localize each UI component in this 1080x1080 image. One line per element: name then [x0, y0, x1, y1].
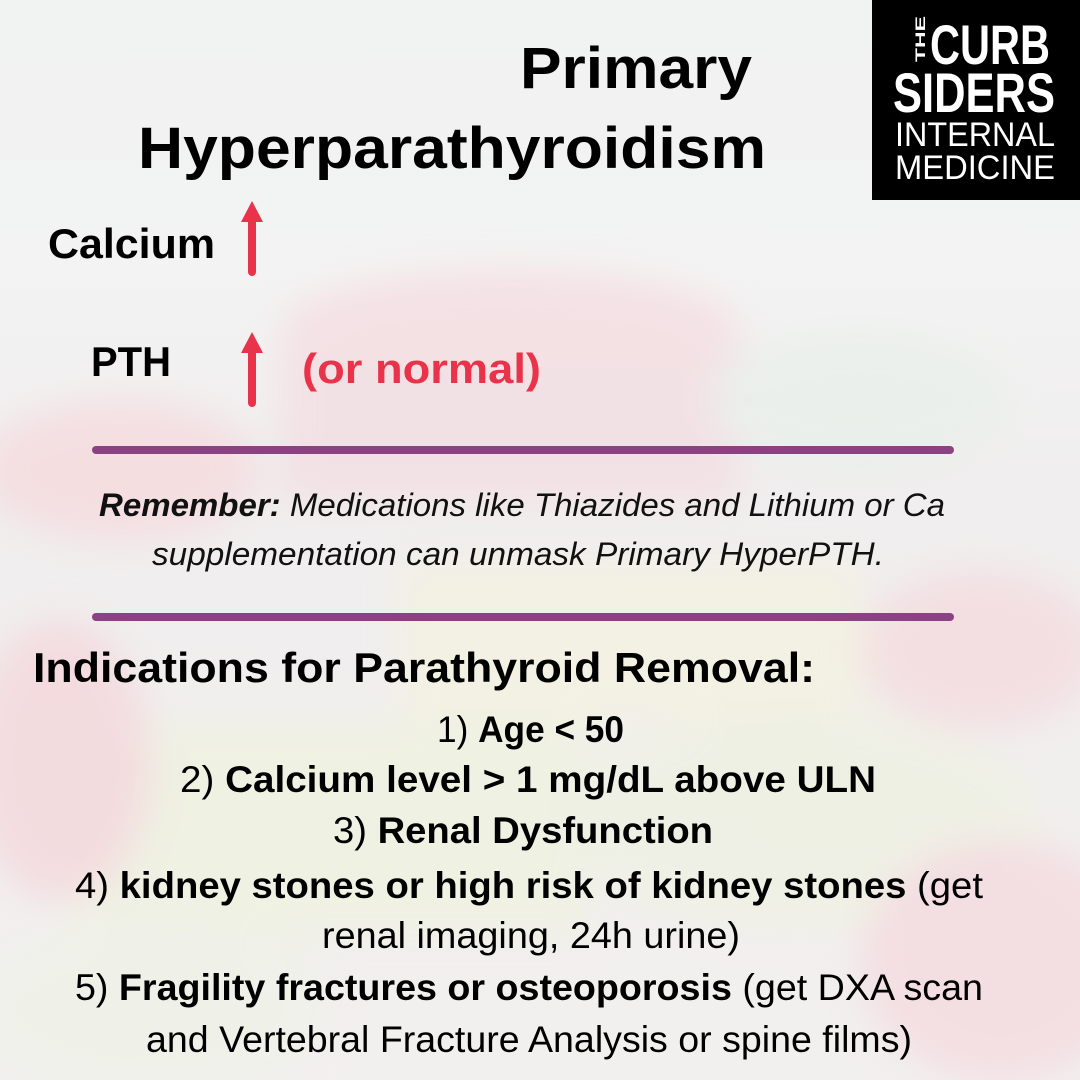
remember note: [99, 487, 945, 572]
logo: THE: [912, 16, 928, 62]
indications list: 2) Calcium level > 1 mg/dL above ULN: [180, 759, 876, 800]
title: [138, 36, 766, 181]
logo: INTERNAL: [895, 116, 1055, 154]
arrow: calcium up: [241, 201, 263, 276]
indications list: [75, 709, 984, 1060]
title: Primary: [520, 36, 752, 101]
title: Hyperparathyroidism: [138, 116, 766, 181]
logo: MEDICINE: [895, 149, 1055, 187]
label: PTH: PTH: [91, 338, 171, 385]
or normal: (or normal): [302, 345, 541, 392]
indications list: 1) Age < 50: [437, 709, 624, 750]
heading: indications: Indications for Parathyroid Removal:: [33, 644, 815, 691]
indications list: 3) Renal Dysfunction: [333, 810, 713, 851]
logo: [872, 0, 1080, 200]
remember note: supplementation can unmask Primary HyperPTH.: [152, 536, 884, 572]
remember note: Remember: Medications like Thiazides and Lithium or Ca: [99, 487, 945, 523]
indications list: renal imaging, 24h urine): [322, 915, 740, 956]
arrow: PTH up: [241, 332, 263, 407]
indications list: and Vertebral Fracture Analysis or spine films): [146, 1019, 912, 1060]
background pills: [0, 270, 1080, 1080]
indications list: 5) Fragility fractures or osteoporosis (get DXA scan: [75, 967, 983, 1008]
indications list: 4) kidney stones or high risk of kidney stones (get: [75, 865, 984, 906]
label: calcium: Calcium: [48, 220, 215, 267]
